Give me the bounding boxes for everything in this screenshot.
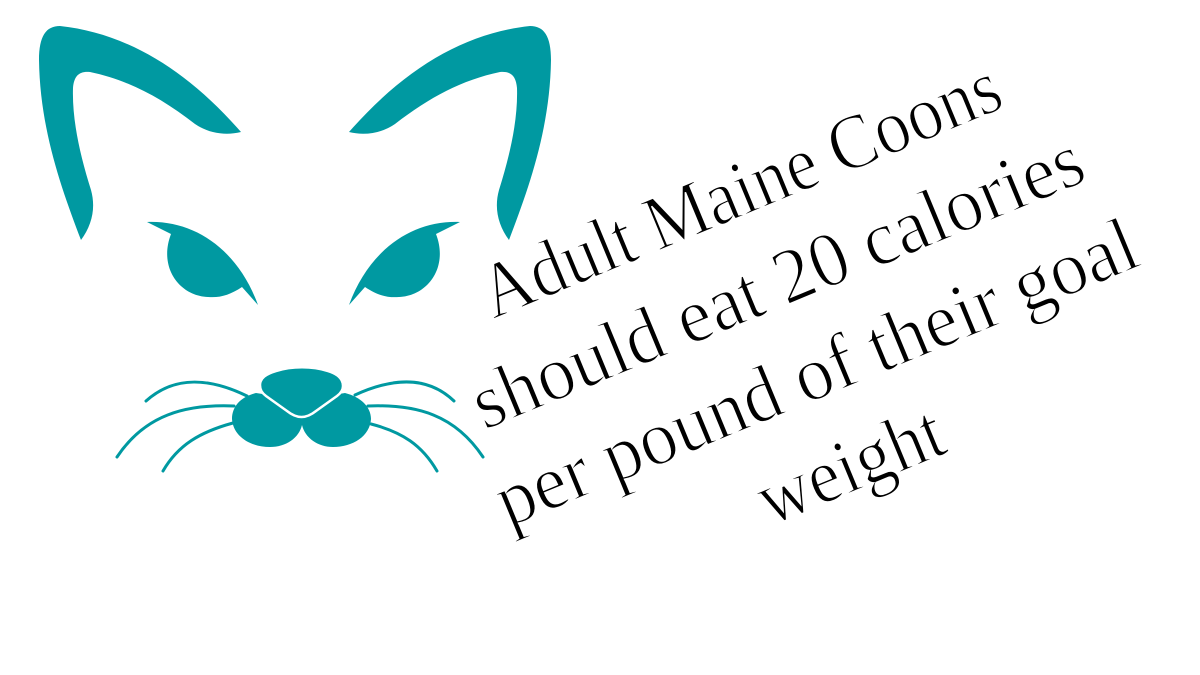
text line 4: weight: [743, 387, 957, 542]
icon: whiskers: [117, 382, 483, 471]
text line 2: should eat 20 calories: [458, 115, 1096, 446]
icon: cat face: [39, 26, 551, 471]
icon: muzzle: [232, 393, 371, 447]
text line 3: per pound of their goal: [481, 200, 1150, 543]
icon: nose: [260, 367, 343, 417]
icon: right eye: [349, 222, 460, 305]
icon: right ear: [349, 26, 551, 240]
icon: left ear: [39, 26, 241, 240]
icon: left eye: [147, 222, 258, 305]
text line 1: Adult Maine Coons: [466, 42, 1013, 335]
text block: calorie fact: [458, 42, 1150, 543]
